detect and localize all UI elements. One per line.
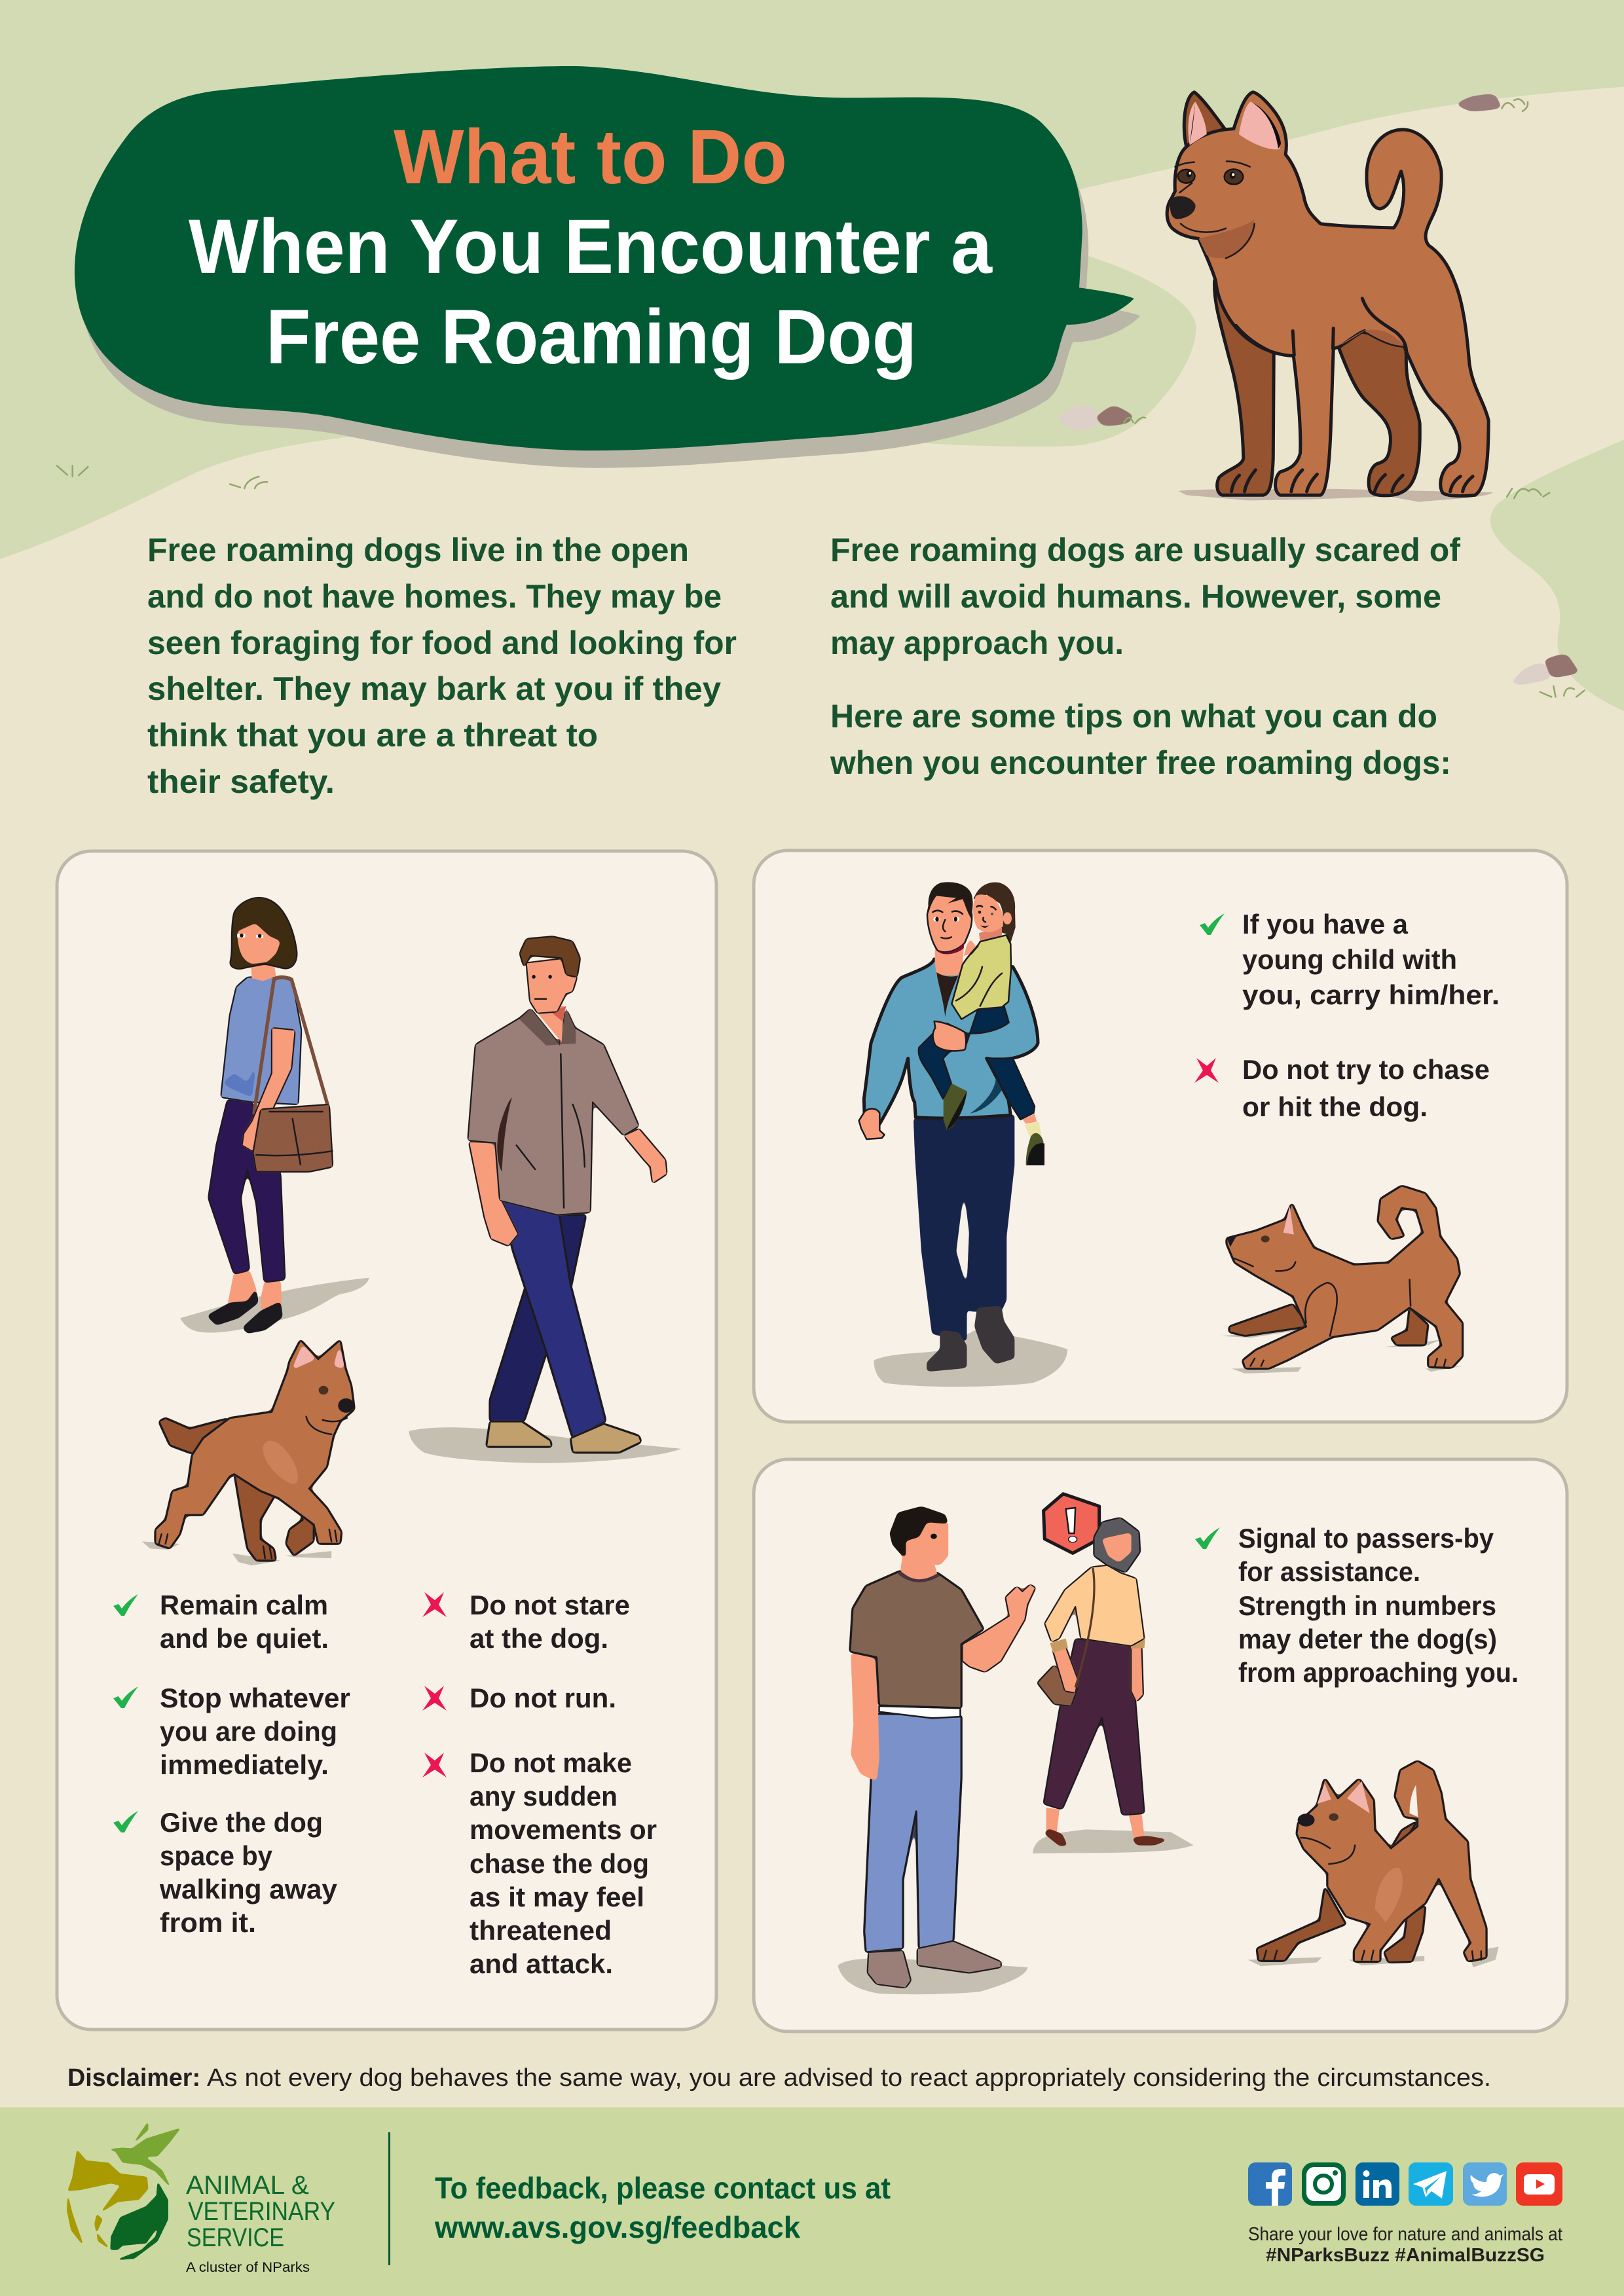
intro text left: Free roaming dogs live in the open: [147, 532, 689, 568]
tip: no sudden movements: [470, 1747, 657, 1979]
tip: do not stare: [470, 1590, 630, 1654]
tip: remain calm: Remain calm: [160, 1590, 328, 1620]
shadows: [1247, 1946, 1499, 1967]
shoes: [487, 1421, 641, 1453]
icon: linkedin: [1356, 2162, 1399, 2206]
logo text: SERVICE: [187, 2223, 284, 2252]
man shadow: [409, 1427, 681, 1463]
child face: [973, 894, 1003, 932]
hair: [1094, 1518, 1140, 1573]
collar: [899, 1573, 938, 1581]
jacket folds: [970, 1078, 1002, 1114]
child hair: [974, 883, 1016, 943]
bag strap: [254, 977, 328, 1114]
tail: [159, 1418, 230, 1453]
check icon: [1195, 1527, 1220, 1549]
title line: Free Roaming Dog: Free Roaming Dog: [266, 294, 917, 380]
icon: warning hexagon: [1044, 1494, 1099, 1553]
bag: [253, 1104, 333, 1172]
logo text: A cluster of NParks: [186, 2260, 310, 2275]
man's right hand: [933, 1021, 966, 1051]
t-shirt: [221, 977, 301, 1104]
shirt: [468, 1008, 639, 1215]
illustration: man carrying child: [859, 882, 1044, 1165]
boots: [927, 1306, 1014, 1372]
far hind leg: [234, 1472, 276, 1561]
shoulder highlight: [1375, 1868, 1403, 1922]
share text: [1248, 2224, 1562, 2266]
intro text right: and will avoid humans. However, some: [830, 578, 1441, 615]
shoes: [868, 1941, 1001, 1988]
intro text right: Free roaming dogs are usually scared of: [830, 532, 1460, 568]
ground shadow: [1179, 489, 1493, 502]
intro text left: think that you are a threat to: [147, 717, 598, 754]
grass centre: [1124, 418, 1145, 424]
green hill right: [1490, 439, 1624, 711]
illustrations panel 3: [838, 1494, 1499, 1994]
woman shadow: [180, 1278, 369, 1333]
tip: do not chase: Do not try to chase: [1242, 1054, 1490, 1085]
intro text right: when you encounter free roaming dogs:: [830, 744, 1451, 781]
rock top right: [1455, 94, 1502, 112]
ear left inner: [1188, 101, 1207, 145]
face: [237, 924, 280, 964]
arm: [242, 1028, 295, 1151]
toes: [1232, 470, 1473, 492]
illustration: trotting dog: [142, 1339, 354, 1565]
nose: [1170, 196, 1196, 219]
nose: [1298, 1813, 1315, 1827]
tip: no sudden movements: threatened: [470, 1915, 612, 1946]
tip: no sudden movements: and attack.: [470, 1948, 613, 1979]
tip: do not stare: Do not stare: [470, 1590, 630, 1620]
right arm: [963, 1584, 1035, 1672]
bubble body: [75, 66, 1134, 450]
far legs: [1257, 1887, 1346, 1961]
share text: #NParksBuzz #AnimalBuzzSG: [1266, 2245, 1545, 2266]
tip: carry child: you, carry him/her.: [1242, 979, 1500, 1010]
child near shoe: [944, 1084, 967, 1130]
far ear: [1184, 92, 1225, 147]
cross icon 1: [422, 1592, 447, 1617]
tip: signal: Strength in numbers: [1238, 1590, 1496, 1621]
arms: [1052, 1644, 1078, 1693]
child top: [951, 935, 1011, 1019]
neck: [935, 947, 964, 975]
cuffs: [1050, 1637, 1145, 1653]
hair: [890, 1506, 948, 1559]
tip: signal: from approaching you.: [1238, 1657, 1519, 1688]
tip: give space: [159, 1807, 338, 1938]
ears: [291, 1345, 344, 1370]
lines: [1264, 1838, 1481, 1960]
hair: [230, 898, 297, 969]
throat shading: [1199, 220, 1254, 258]
intro text left: [147, 532, 737, 800]
tip: do not run: Do not run.: [470, 1683, 616, 1713]
feedback text: [434, 2171, 891, 2244]
intro text right: may approach you.: [830, 625, 1124, 661]
panel: carry child: [754, 850, 1567, 1422]
right arm: [623, 1129, 667, 1184]
shoulder highlight: [263, 1441, 298, 1484]
shoes: [207, 1288, 283, 1334]
tip: signal: for assistance.: [1238, 1556, 1420, 1587]
illustrations panel 2 lower: [874, 1114, 1463, 1387]
body lines: [1236, 299, 1407, 357]
intro text left: their safety.: [147, 763, 335, 800]
do not list: [422, 1590, 657, 1979]
logo: AVS: [67, 2121, 335, 2275]
collar: [519, 1008, 576, 1046]
eyes: [1178, 169, 1243, 185]
ear: [1283, 1207, 1294, 1235]
tip: no sudden movements: any sudden: [470, 1781, 618, 1812]
feedback text: To feedback, please contact us at: [435, 2171, 891, 2205]
child pants: [919, 1006, 1009, 1099]
left arm: [469, 1142, 518, 1246]
grass right: [1540, 686, 1585, 697]
shadow: [874, 1330, 1067, 1387]
tip: no sudden movements: chase the dog: [470, 1848, 649, 1879]
man's left hand: [859, 1109, 885, 1139]
landscape hills and rocks: [0, 0, 1624, 711]
tail notch: [1409, 1785, 1418, 1817]
cross icon 3: [422, 1753, 447, 1777]
left arm: [851, 1653, 879, 1781]
tip: carry child: [1242, 909, 1500, 1010]
tip: do not stare: at the dog.: [470, 1623, 608, 1654]
child face details: [977, 905, 996, 928]
tip: carry child: If you have a: [1242, 909, 1409, 939]
rock dark centre: [1096, 405, 1133, 427]
illustration: woman passer-by: [1033, 1518, 1194, 1853]
panel: stay calm: [57, 851, 716, 2030]
title line: When You Encounter a: When You Encounter a: [189, 204, 993, 290]
icon: facebook: [1248, 2162, 1292, 2206]
logo text: VETERINARY: [188, 2197, 335, 2226]
check icon 2: [113, 1686, 138, 1708]
green hill top: [0, 0, 1624, 559]
hair: [519, 936, 580, 977]
feedback text: www.avs.gov.sg/feedback: [434, 2210, 800, 2244]
ear right inner: [1239, 101, 1280, 149]
trousers: [208, 1100, 285, 1282]
footer: [0, 2107, 1624, 2296]
icon: telegram: [1409, 2162, 1453, 2206]
bubble shadow: [81, 84, 1140, 468]
tip: give space: walking away: [159, 1874, 338, 1904]
child leg and sock: [1023, 1114, 1037, 1124]
logo text: ANIMAL &: [186, 2171, 309, 2200]
neck: [251, 962, 276, 981]
ears: [1318, 1781, 1370, 1813]
panel background: [754, 1459, 1567, 2032]
intro text right: [830, 532, 1460, 781]
title line: What to Do: What to Do: [394, 114, 787, 200]
legs: [227, 1270, 282, 1321]
face: [900, 1520, 948, 1567]
panel background: [57, 851, 716, 2030]
share text: Share your love for nature and animals at: [1248, 2224, 1562, 2245]
child far leg: [987, 1059, 1035, 1120]
belly shading: [1333, 330, 1404, 347]
dog shadows: [142, 1541, 331, 1565]
tip: no sudden movements: movements or: [470, 1814, 657, 1845]
eye: [1329, 1813, 1338, 1821]
jeans: [864, 1714, 961, 1952]
neck: [532, 1006, 564, 1042]
t-shirt: [850, 1571, 984, 1708]
social icons: [1248, 2162, 1562, 2206]
tip: remain calm: and be quiet.: [160, 1623, 329, 1654]
intro text right: Here are some tips on what you can do: [830, 698, 1437, 735]
muzzle line: [159, 1417, 347, 1558]
far legs: [1229, 1304, 1309, 1336]
check icon 3: [113, 1811, 138, 1832]
back leg: [490, 1215, 586, 1421]
body: [155, 1339, 354, 1548]
tip: carry child: young child with: [1242, 944, 1457, 975]
grass top right: [1502, 99, 1528, 111]
cross icon 2: [422, 1686, 447, 1711]
tip: stop whatever: [160, 1683, 350, 1780]
intro text left: shelter. They may bark at you if they: [147, 670, 721, 707]
intro text left: seen foraging for food and looking for: [147, 625, 737, 661]
trousers: [1044, 1639, 1145, 1815]
face lines: [1175, 161, 1255, 258]
hair: [928, 882, 973, 919]
man legs: [874, 1114, 1067, 1387]
top folds: [956, 946, 1002, 1006]
jacket: [864, 959, 1038, 1124]
far front leg: [1215, 281, 1274, 495]
title speech bubble: [75, 66, 1140, 468]
icon: instagram: [1302, 2162, 1346, 2206]
far rear leg: [1338, 331, 1420, 496]
logo text: [186, 2171, 335, 2275]
body: [1227, 1186, 1463, 1368]
tip: no sudden movements: as it may feel: [470, 1882, 644, 1912]
tip: do not chase: or hit the dog.: [1242, 1091, 1428, 1122]
child hand: [964, 941, 976, 956]
head: [526, 958, 577, 1013]
child far shoe: [1026, 1133, 1044, 1165]
panel background: [754, 850, 1567, 1422]
logo mark: [67, 2121, 181, 2260]
child ear: [1003, 912, 1012, 924]
illustration: alert dog: [1247, 1760, 1499, 1967]
rock dark right: [1544, 653, 1579, 678]
icon: youtube: [1516, 2162, 1562, 2206]
illustration: woman with bag: [180, 898, 369, 1334]
nose: [1227, 1235, 1237, 1247]
tip: do not chase: [1242, 1054, 1490, 1122]
tip: give space: from it.: [160, 1907, 256, 1938]
eye: [931, 1534, 937, 1539]
disclaimer: Disclaimer:: [67, 2064, 200, 2092]
tip: remain calm: [160, 1590, 329, 1654]
panel: signal passers-by: [754, 1459, 1567, 2032]
body: [1297, 1760, 1486, 1961]
shadow: [1033, 1829, 1194, 1853]
feet: [1046, 1808, 1145, 1838]
eye: [319, 1386, 328, 1394]
eye: [1261, 1235, 1270, 1243]
jeans: [913, 1114, 1014, 1341]
tip: signal: [1238, 1523, 1519, 1688]
belt: [879, 1706, 960, 1718]
beard line: [938, 943, 965, 954]
neck: [900, 1552, 938, 1582]
rock light right: [1510, 661, 1551, 685]
tip: give space: Give the dog: [160, 1807, 323, 1838]
icon: twitter: [1463, 2162, 1507, 2206]
bag: [1037, 1665, 1078, 1706]
undershirt: [936, 972, 958, 1017]
rock light centre: [1056, 405, 1098, 432]
check icon 1: [113, 1594, 138, 1616]
disclaimer: As not every dog behaves the same way, you are advised to react appropriately considering the circumstances.: [207, 2064, 1491, 2092]
illustration: dog bowing: [1221, 1186, 1463, 1374]
divider: [388, 2132, 390, 2265]
tip: stop whatever: you are doing: [160, 1716, 337, 1747]
cross icon: [1194, 1058, 1219, 1083]
illustration: man waving: [838, 1506, 1035, 1994]
intro text left: and do not have homes. They may be: [147, 578, 722, 615]
grass left 2: [230, 477, 267, 488]
shirt folds: [497, 1097, 512, 1172]
do list: [113, 1590, 350, 1938]
shadow: [838, 1958, 1027, 1994]
lines: [1234, 1258, 1446, 1366]
child neck: [979, 928, 1002, 941]
body and head: [1167, 92, 1488, 496]
tip: no sudden movements: Do not make: [470, 1747, 632, 1778]
shirt fold: [223, 1064, 256, 1097]
nose: [338, 1398, 354, 1413]
grass left 1: [57, 465, 88, 477]
shadows: [1221, 1330, 1463, 1374]
tip: signal: may deter the dog(s): [1238, 1624, 1497, 1654]
strap: [1075, 1568, 1094, 1687]
tip: stop whatever: immediately.: [160, 1749, 329, 1780]
blouse: [1044, 1565, 1145, 1646]
check icon: [1200, 913, 1225, 935]
face details: [932, 911, 963, 938]
illustration: standing dog: [1167, 92, 1493, 502]
face: [1102, 1533, 1131, 1563]
shoes: [1044, 1829, 1168, 1846]
face: [532, 975, 536, 979]
grass near dog: [1507, 488, 1549, 498]
illustrations panel 1: [142, 898, 681, 1565]
far front paw: [286, 1510, 314, 1556]
tip: stop whatever: Stop whatever: [160, 1683, 350, 1713]
front leg: [500, 1201, 606, 1438]
illustration: walking man: [409, 936, 681, 1463]
eyes: [237, 934, 263, 938]
tip: give space: space by: [160, 1840, 273, 1871]
head: [927, 892, 972, 952]
footer band: [0, 2107, 1624, 2296]
tip: signal: Signal to passers-by: [1238, 1523, 1494, 1554]
